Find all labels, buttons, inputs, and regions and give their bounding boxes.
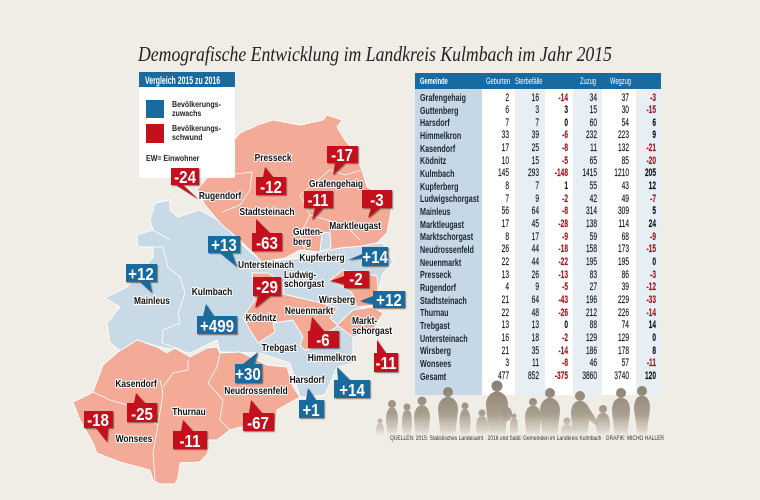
title: Demografische Entwicklung im Landkreis Kulmbach im Jahr 2015 — [137, 42, 612, 66]
municipality labels: Ködnitz — [246, 312, 277, 324]
table rows: 229 — [618, 293, 629, 305]
callout: Marktleugast — [362, 190, 392, 218]
table header: Sterbefälle — [515, 76, 543, 86]
table rows: 45 — [532, 217, 539, 229]
table rows: 17 — [502, 141, 509, 153]
callout: Kasendorf — [127, 393, 157, 424]
table rows: 852 — [528, 369, 539, 381]
silhouettes of people — [376, 380, 650, 438]
table rows: Kasendorf — [420, 143, 455, 154]
callout: Himmelkron: +14 — [339, 380, 366, 400]
callout: Wirsberg: +12 — [376, 290, 402, 310]
table rows: -15 — [646, 103, 656, 115]
table rows: Himmelkron — [420, 130, 461, 141]
callout: Kupferberg — [348, 247, 389, 267]
table rows: -9 — [650, 230, 656, 242]
region: population decline centre — [243, 273, 338, 350]
callout: Harsdorf — [299, 388, 324, 420]
table rows: 1210 — [614, 166, 629, 178]
table rows: 56 — [502, 204, 509, 216]
municipality labels: Ludwig- — [284, 269, 316, 281]
table rows: Guttenberg — [420, 105, 458, 116]
table rows: 46 — [590, 356, 597, 368]
table rows: 21 — [502, 293, 509, 305]
callout: Mainleus — [126, 264, 157, 293]
table rows: 145 — [498, 166, 509, 178]
table rows: 4 — [505, 280, 509, 292]
table rows: 83 — [590, 268, 597, 280]
table rows: -43 — [558, 293, 568, 305]
region: population decline north — [197, 115, 393, 262]
municipality labels: Marktleugast — [329, 220, 382, 232]
callout: Rugendorf — [171, 167, 199, 199]
table rows: 65 — [590, 154, 597, 166]
legend — [139, 72, 235, 178]
table rows: 86 — [622, 268, 629, 280]
table rows: Wonsees — [420, 358, 451, 369]
table rows: 13 — [502, 318, 509, 330]
table rows: -148 — [555, 166, 568, 178]
callout: Guttenberg: -11 — [307, 190, 329, 210]
table rows: 9 — [652, 128, 656, 140]
table column shading — [415, 73, 661, 395]
table rows: 7 — [505, 192, 509, 204]
table rows: 49 — [622, 192, 629, 204]
table rows: 477 — [498, 369, 509, 381]
table rows: Grafengehaig — [420, 92, 466, 103]
table rows: -5 — [562, 280, 568, 292]
table rows: -14 — [558, 91, 568, 103]
table rows: 195 — [586, 255, 597, 267]
table rows: 22 — [502, 306, 509, 318]
table rows: 9 — [535, 192, 539, 204]
table rows: 48 — [532, 306, 539, 318]
table rows: 11 — [532, 356, 539, 368]
callout: Thurnau: -11 — [179, 431, 201, 451]
region: Ludwigschorgast — [330, 270, 378, 307]
table rows: 114 — [618, 217, 629, 229]
table rows: 64 — [532, 204, 539, 216]
table rows: 2 — [505, 91, 509, 103]
map of the district — [73, 115, 393, 484]
municipality labels: Harsdorf — [290, 374, 325, 386]
table rows: Mainleus — [420, 206, 451, 217]
table rows: -22 — [558, 255, 568, 267]
callout: Kulmbach: +499 — [200, 316, 234, 336]
table rows: 54 — [622, 116, 629, 128]
table rows: 68 — [622, 230, 629, 242]
callout: Himmelkron — [334, 367, 370, 400]
table rows: -20 — [646, 154, 656, 166]
table rows: 57 — [622, 356, 629, 368]
callout: Kasendorf: -25 — [131, 404, 153, 424]
table rows: 0 — [652, 331, 656, 343]
callout: Ludwigschorgast — [330, 269, 369, 289]
table rows: 129 — [586, 331, 597, 343]
table rows: 212 — [586, 306, 597, 318]
table rows: 3740 — [614, 369, 629, 381]
table rows: -26 — [558, 306, 568, 318]
table rows: Thurnau — [420, 307, 449, 318]
municipality labels: Kupferberg — [299, 252, 345, 264]
table rows: 60 — [590, 116, 597, 128]
table rows: Marktschorgast — [420, 231, 473, 242]
table rows — [420, 91, 656, 382]
callout: Untersteinach: +13 — [211, 235, 237, 255]
table rows: 18 — [532, 331, 539, 343]
table rows: 7 — [535, 116, 539, 128]
table rows: 22 — [502, 255, 509, 267]
municipality labels: Mainleus — [134, 295, 170, 307]
table rows: 15 — [532, 154, 539, 166]
table rows: Harsdorf — [420, 117, 450, 128]
municipality labels: Stadtsteinach — [240, 206, 295, 218]
callout: Thurnau — [173, 420, 207, 451]
table rows: -28 — [558, 217, 568, 229]
table rows: Ködnitz — [420, 155, 447, 166]
region: population decline south — [73, 340, 300, 484]
table rows: 7 — [535, 179, 539, 191]
table rows: 0 — [564, 318, 568, 330]
table rows: -8 — [562, 141, 568, 153]
callout: Neudrossenfeld — [243, 400, 274, 433]
table rows: 6 — [505, 103, 509, 115]
table rows: 15 — [590, 103, 597, 115]
table rows: 55 — [590, 179, 597, 191]
table rows: 9 — [535, 280, 539, 292]
table rows: -11 — [647, 356, 656, 368]
table rows: -7 — [650, 192, 656, 204]
callout: Marktleugast: -3 — [370, 190, 384, 210]
table rows: 25 — [532, 141, 539, 153]
legend: schwund — [172, 132, 203, 142]
table rows: Rugendorf — [420, 282, 456, 293]
table rows: 26 — [532, 268, 539, 280]
table rows: 13 — [532, 318, 539, 330]
municipality labels: schorgast — [284, 278, 325, 290]
callout: Neudrossenfeld: -67 — [247, 413, 269, 433]
table rows: 3 — [564, 103, 568, 115]
table rows: 1 — [564, 179, 568, 191]
table rows: 186 — [586, 344, 597, 356]
table rows: 42 — [590, 192, 597, 204]
table header: Geburten — [486, 76, 510, 86]
callout: Neuenmarkt — [308, 317, 339, 350]
table rows: 196 — [586, 293, 597, 305]
table rows: -9 — [562, 230, 568, 242]
table rows: 293 — [528, 166, 539, 178]
callout: Untersteinach — [208, 235, 240, 267]
table rows: -8 — [562, 204, 568, 216]
table rows: -21 — [646, 141, 656, 153]
table rows: 314 — [586, 204, 597, 216]
source line: QUELLEN: 2015: Statistisches Landesamt · 2016 und Saldi: Gemeinden im Landkreis Kulmbach · GRAFIK: MICHO HALLER — [390, 435, 664, 442]
table rows: -8 — [562, 356, 568, 368]
table rows: 30 — [622, 103, 629, 115]
callout: Presseck — [256, 167, 286, 197]
table rows: Neudrossenfeld — [420, 244, 474, 255]
callout: Kulmbach — [197, 304, 237, 336]
callout: Wonsees: -18 — [87, 410, 109, 430]
table rows: -33 — [646, 293, 656, 305]
table rows: -2 — [562, 331, 568, 343]
municipality labels — [115, 152, 393, 445]
table rows: 16 — [532, 91, 539, 103]
callout: Marktschorgast: -11 — [375, 353, 397, 373]
callout: Wonsees — [84, 410, 113, 442]
table rows: 3860 — [582, 369, 597, 381]
table rows: 1415 — [582, 166, 597, 178]
callout: Guttenberg — [304, 190, 333, 220]
table rows: 59 — [590, 230, 597, 242]
table header: Wegzug — [610, 76, 631, 86]
table rows: -13 — [558, 268, 568, 280]
table rows: Wirsberg — [420, 345, 451, 356]
municipality labels: Wonsees — [116, 433, 152, 445]
table rows: 3 — [535, 103, 539, 115]
table rows: 17 — [502, 217, 509, 229]
table rows: 8 — [505, 230, 509, 242]
legend: Vergleich 2015 zu 2016 — [145, 74, 220, 86]
table rows: 8 — [505, 179, 509, 191]
callout: Grafengehaig: -17 — [331, 145, 353, 165]
callout: Marktschorgast — [374, 340, 398, 373]
data table — [415, 73, 661, 395]
municipality labels: Presseck — [255, 152, 292, 164]
table rows: 8 — [652, 344, 656, 356]
table rows: Marktleugast — [420, 219, 464, 230]
region: Marktschorgast — [337, 307, 383, 337]
table rows: 88 — [590, 318, 597, 330]
callout: Harsdorf: +1 — [302, 400, 320, 420]
table rows: 173 — [618, 242, 629, 254]
table rows: 3 — [505, 356, 509, 368]
table rows: 5 — [652, 204, 656, 216]
legend: zuwachs — [172, 108, 202, 118]
table rows: 27 — [590, 280, 597, 292]
municipality labels: Neudrossenfeld — [224, 385, 288, 397]
internal municipal boundaries — [93, 160, 362, 480]
table rows: 24 — [649, 217, 656, 229]
table rows: 34 — [590, 91, 597, 103]
legend: EW= Einwohner — [146, 153, 199, 163]
table rows: 35 — [532, 344, 539, 356]
table rows: 44 — [532, 242, 539, 254]
table rows: 64 — [532, 293, 539, 305]
table rows: 0 — [652, 255, 656, 267]
table rows: 138 — [586, 217, 597, 229]
callout: Wirsberg — [360, 290, 405, 310]
table rows: 85 — [622, 154, 629, 166]
table header: Zuzug — [580, 76, 596, 86]
table rows: 17 — [532, 230, 539, 242]
callout: Ludwigschorgast: -2 — [349, 269, 363, 289]
table header: Gemeinde — [420, 76, 448, 86]
table rows: 33 — [502, 128, 509, 140]
municipality labels: Markt- — [352, 315, 377, 327]
table rows: -375 — [555, 369, 568, 381]
table rows: 195 — [618, 255, 629, 267]
callout: Grafengehaig — [327, 145, 358, 175]
table header — [415, 73, 661, 89]
table rows: 178 — [618, 344, 629, 356]
table rows: 39 — [622, 280, 629, 292]
table rows: -2 — [562, 192, 568, 204]
table rows: 7 — [505, 116, 509, 128]
table rows: 6 — [652, 116, 656, 128]
region: population growth — [105, 200, 393, 397]
table rows: -3 — [650, 268, 656, 280]
table rows: 37 — [622, 91, 629, 103]
municipality labels: Untersteinach — [238, 259, 294, 271]
table rows: 232 — [586, 128, 597, 140]
table rows: Presseck — [420, 269, 451, 280]
region: Guttenberg gap — [320, 232, 331, 251]
legend: Bevölkerungs- — [172, 99, 221, 109]
table rows: 10 — [502, 154, 509, 166]
table rows: -5 — [562, 154, 568, 166]
municipality labels: Kasendorf — [115, 378, 158, 390]
legend: Bevölkerungs- — [172, 123, 221, 133]
callout: Stadtsteinach — [252, 219, 282, 253]
table rows: 13 — [502, 268, 509, 280]
municipality labels: Trebgast — [262, 342, 297, 354]
table rows: 0 — [564, 116, 568, 128]
callouts: values per municipality — [84, 145, 405, 451]
table rows: Kulmbach — [420, 168, 454, 179]
municipality labels: Kulmbach — [192, 286, 232, 298]
callout: Mainleus: +12 — [128, 264, 154, 284]
table rows: 14 — [649, 318, 656, 330]
table rows: 44 — [532, 255, 539, 267]
table rows: 26 — [502, 242, 509, 254]
table rows: Neuenmarkt — [420, 257, 461, 268]
table rows: Stadtsteinach — [420, 295, 467, 306]
callout: Ködnitz: -29 — [256, 277, 278, 297]
table rows: -18 — [558, 242, 568, 254]
callout: Neuenmarkt: -6 — [316, 330, 330, 350]
callout: Stadtsteinach: -63 — [256, 233, 278, 253]
table rows: 205 — [645, 166, 656, 178]
municipality labels: schorgast — [352, 325, 393, 337]
callout: Rugendorf: -24 — [174, 167, 197, 187]
callout: Trebgast: +30 — [235, 364, 261, 384]
municipality labels: Grafengehaig — [309, 178, 363, 190]
table rows: 120 — [645, 369, 656, 381]
table rows: -14 — [558, 344, 568, 356]
callout: Kupferberg: +14 — [362, 247, 389, 267]
municipality labels: berg — [293, 236, 311, 248]
table rows: 223 — [618, 128, 629, 140]
table rows: 129 — [618, 331, 629, 343]
table rows: -6 — [562, 128, 568, 140]
table rows: 21 — [502, 344, 509, 356]
table rows: -12 — [646, 280, 656, 292]
municipality labels: Rugendorf — [199, 190, 242, 202]
table rows: Untersteinach — [420, 333, 468, 344]
table rows: Ludwigschorgast — [420, 193, 479, 204]
callout: Ködnitz — [253, 277, 281, 308]
municipality labels: Himmelkron — [308, 352, 356, 364]
table rows: 226 — [618, 306, 629, 318]
table rows: 39 — [532, 128, 539, 140]
table rows: -3 — [650, 91, 656, 103]
table rows: Kupferberg — [420, 181, 458, 192]
table rows: 309 — [618, 204, 629, 216]
callout: Trebgast — [235, 352, 262, 384]
table rows: 158 — [586, 242, 597, 254]
municipality labels: Neuenmarkt — [285, 305, 334, 317]
municipality labels: Gutten- — [293, 226, 323, 238]
table rows: Trebgast — [420, 320, 450, 331]
table rows: 12 — [649, 179, 656, 191]
table rows: 16 — [502, 331, 509, 343]
table rows: -14 — [646, 306, 656, 318]
table rows: 43 — [622, 179, 629, 191]
table rows: -15 — [646, 242, 656, 254]
table rows: 74 — [622, 318, 629, 330]
table rows: 132 — [618, 141, 629, 153]
municipality labels: Thurnau — [172, 406, 206, 418]
table rows: 11 — [590, 141, 597, 153]
municipality labels: Wirsberg — [319, 294, 355, 306]
callout: Presseck: -12 — [260, 177, 282, 197]
table rows: Gesamt — [420, 371, 446, 382]
